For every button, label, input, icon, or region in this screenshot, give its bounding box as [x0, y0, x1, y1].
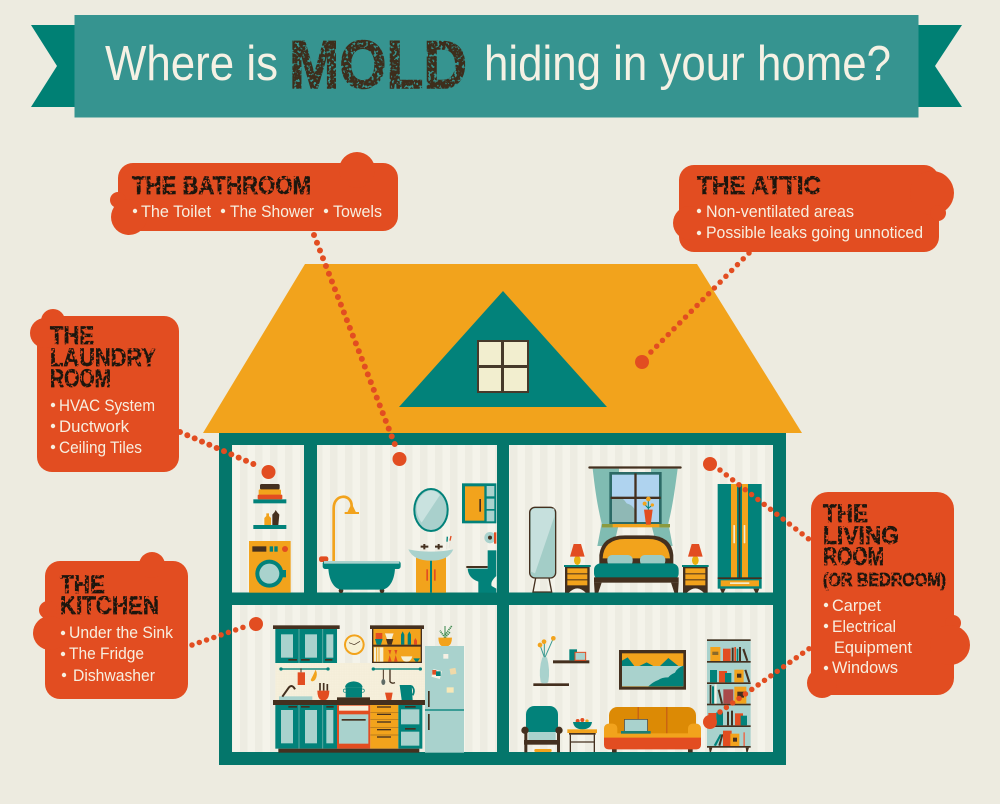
bookcase	[707, 639, 751, 752]
bullet list: Equipment	[834, 638, 912, 657]
bullet list	[133, 202, 382, 221]
sofa	[604, 707, 701, 752]
bullet list: Under the Sink	[69, 623, 173, 642]
wardrobe	[718, 484, 762, 593]
sink	[408, 536, 453, 593]
heading	[823, 500, 946, 590]
heading: LIVING	[823, 522, 899, 550]
pot	[337, 681, 370, 700]
callout: the living room	[807, 492, 970, 698]
room: kitchen	[273, 625, 464, 753]
callout: the bathroom	[110, 152, 398, 235]
mug	[385, 693, 393, 700]
heading	[50, 322, 156, 393]
bullet list	[824, 596, 912, 677]
window sill	[602, 524, 670, 527]
callout: the laundry room	[30, 309, 179, 472]
title banner	[31, 15, 962, 118]
connector: living room top	[703, 457, 810, 540]
bullet list: The Shower	[230, 202, 314, 221]
heading: ROOM	[823, 543, 884, 571]
heading: ROOM	[50, 365, 111, 393]
laptop	[621, 719, 651, 734]
room backgrounds	[232, 445, 773, 752]
connector: living room bottom	[703, 648, 810, 729]
heading: THE	[50, 322, 94, 350]
bullet list: Ductwork	[59, 417, 129, 436]
nightstand left	[564, 544, 591, 593]
window	[609, 472, 662, 524]
heading: THE	[823, 500, 868, 528]
callout shape	[30, 309, 179, 472]
heading: THE ATTIC	[697, 172, 821, 200]
title text: Where is	[105, 37, 278, 91]
laundry shelves	[253, 499, 286, 529]
wall clock	[344, 634, 365, 655]
bullet list: Possible leaks going unnoticed	[706, 223, 923, 242]
heading	[60, 571, 159, 620]
heading: THE BATHROOM	[132, 172, 311, 200]
curtains	[593, 469, 678, 546]
plant	[438, 626, 452, 646]
bullet list	[51, 396, 155, 457]
banner panel	[74, 15, 918, 118]
books	[708, 647, 750, 746]
bullet list: Dishwasher	[73, 666, 155, 685]
bullet list: Carpet	[832, 596, 881, 615]
title word: mold: MOLD	[289, 27, 467, 103]
callout shape	[673, 165, 954, 252]
toilet	[466, 550, 496, 593]
room: laundry and bathroom	[249, 483, 496, 593]
kitchen sink	[279, 686, 312, 700]
bathtub	[323, 561, 401, 593]
towels	[258, 484, 282, 499]
house walls	[219, 433, 786, 765]
standing mirror	[530, 507, 556, 592]
bullet list: Towels	[333, 202, 382, 221]
shower	[319, 497, 359, 562]
bullet list: HVAC System	[59, 396, 155, 415]
bottles	[264, 510, 279, 525]
knife block	[317, 683, 329, 700]
connector: bathroom	[314, 235, 406, 466]
fridge	[425, 646, 464, 753]
utensil rails	[279, 667, 422, 685]
mirror	[414, 489, 448, 531]
open shelf	[370, 625, 424, 663]
callout shape	[807, 492, 970, 698]
room: living room	[521, 636, 751, 752]
bullet list: Non-ventilated areas	[706, 202, 854, 221]
dormer	[399, 291, 607, 407]
curtain rod	[588, 466, 682, 469]
kitchen plinth	[278, 749, 419, 753]
dishwasher cabinets	[398, 705, 422, 749]
ribbon tails	[31, 25, 962, 107]
bullet list: The Fridge	[69, 644, 144, 663]
toilet paper	[484, 532, 496, 544]
backsplash	[275, 663, 425, 700]
heading: KITCHEN	[60, 592, 159, 620]
nightstand right	[682, 544, 709, 593]
callout: the attic	[673, 165, 954, 252]
kettle	[400, 685, 414, 700]
roof	[203, 264, 802, 433]
bullet list	[697, 202, 923, 242]
bullet list: Windows	[832, 658, 898, 677]
lower cabinets	[275, 705, 337, 749]
bullet list: Electrical	[832, 617, 896, 636]
washing machine	[249, 541, 291, 593]
heading: THE	[60, 571, 105, 599]
callout: the kitchen	[33, 552, 188, 699]
heading: (OR BEDROOM)	[823, 570, 946, 590]
painting	[619, 650, 686, 690]
callout shape	[110, 152, 398, 235]
connector: attic	[635, 253, 749, 369]
connector: laundry room	[180, 432, 276, 479]
room: bedroom	[530, 466, 762, 593]
title text end: hiding in your home?	[484, 37, 891, 91]
callout shape	[33, 552, 188, 699]
house	[203, 264, 802, 765]
dormer window	[477, 340, 529, 393]
connector: kitchen	[192, 617, 263, 645]
drawers	[370, 705, 398, 749]
oven	[337, 705, 370, 749]
bed	[594, 535, 679, 593]
bullet list: Ceiling Tiles	[59, 438, 142, 457]
wall shelves and picture	[533, 649, 589, 686]
side table with fruit bowl	[567, 718, 597, 752]
upper cabinets	[273, 625, 340, 663]
flowers in vase	[643, 497, 654, 525]
counter top	[273, 700, 425, 705]
armchair	[521, 706, 563, 752]
bullet list	[61, 623, 173, 685]
heading: LAUNDRY	[50, 344, 156, 372]
bullet list: The Toilet	[141, 202, 211, 221]
bathroom cabinet	[462, 483, 496, 523]
vase with flowers	[538, 636, 556, 683]
